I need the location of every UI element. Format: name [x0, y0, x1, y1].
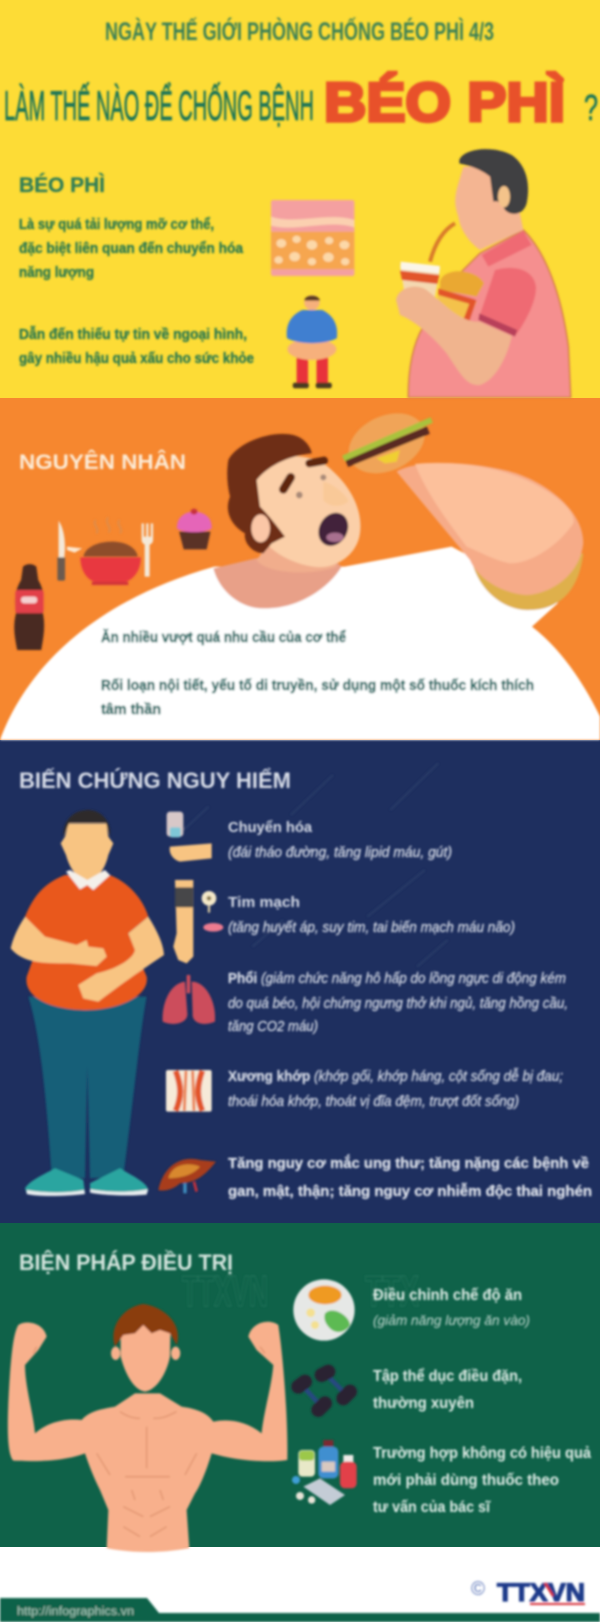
text: cardiovascular — [228, 895, 515, 936]
footer teal strip — [0, 1598, 600, 1622]
watermark — [182, 1267, 419, 1316]
text: exercise — [373, 1367, 522, 1412]
panel: dangerous complications — [11, 763, 592, 1200]
text: lungs: do quá béo, hội chứng ngưng thở khi ngủ, tăng hồng cầu, — [228, 996, 568, 1012]
icon: cola bottle — [14, 564, 44, 650]
text: other causes: tâm thần — [101, 702, 161, 718]
text: definition: năng lượng — [19, 265, 94, 281]
text: exercise: Tập thể dục điều đặn, — [373, 1367, 522, 1385]
heading: obesity highlighted: BÉO PHÌ — [324, 71, 565, 133]
section heading: causes: NGUYÊN NHÂN — [19, 450, 186, 474]
icon: knife, bowl and fork — [57, 517, 153, 585]
illustration: man's white body — [0, 547, 600, 740]
text: medication: tư vấn của bác sĩ — [373, 1499, 491, 1516]
text: other causes — [101, 678, 534, 718]
text: medication: mới phải dùng thuốc theo — [373, 1472, 559, 1489]
text: consequences: Dẫn đến thiếu tự tin về ngoại hình, — [19, 326, 247, 343]
illustration: muscular man — [8, 1304, 287, 1552]
icon: blood glucose test — [167, 812, 212, 862]
icon: lungs — [163, 975, 215, 1024]
text: exercise: thường xuyên — [373, 1395, 474, 1412]
text: other risks: Tăng nguy cơ mắc ung thư; tăng nặng các bệnh về — [228, 1154, 589, 1172]
icon: medicine — [292, 1440, 357, 1505]
logo: copyright TTXVN: © — [471, 1579, 485, 1600]
text: diet — [373, 1287, 530, 1328]
illustration: man eating burger — [213, 402, 583, 610]
panel: treatment — [8, 1250, 591, 1552]
text: cardiovascular: (tăng huyết áp, suy tim, tai biến mạch máu não) — [228, 920, 515, 936]
illustration: large man eating fast food — [396, 149, 571, 397]
panel: causes — [0, 402, 600, 740]
icon: blood pressure cuff on arm — [173, 880, 223, 963]
text: metabolism: (đái tháo đường, tăng lipid máu, gút) — [228, 845, 452, 861]
watermark: TTXVN — [182, 1267, 268, 1316]
text: other risks — [228, 1154, 592, 1200]
section heading: complications: BIẾN CHỨNG NGUY HIỂM — [19, 768, 291, 793]
section heading: treatment: BIỆN PHÁP ĐIỀU TRỊ — [19, 1250, 233, 1275]
text: consequences — [19, 326, 254, 367]
logo: copyright TTXVN: TTXVN — [497, 1579, 585, 1607]
text: bones and joints — [228, 1068, 563, 1110]
watermark: TTX — [365, 1267, 419, 1316]
illustration: man holding belly — [11, 810, 164, 1196]
text: metabolism: Chuyển hóa — [228, 820, 313, 836]
icon: dumbbells — [298, 1372, 350, 1410]
text: cardiovascular: Tim mạch — [228, 895, 300, 911]
text: diet: (giảm năng lượng ăn vào) — [373, 1312, 530, 1328]
text: other causes: Rối loạn nội tiết, yếu tố di truyền, sử dụng một số thuốc kích thích — [101, 678, 534, 694]
icon: skin and fat layers — [271, 200, 354, 276]
icon: small overweight man — [287, 295, 337, 388]
icon: liver — [158, 1159, 216, 1193]
text: consequences: gây nhiều hậu quả xấu cho sức khỏe — [19, 351, 254, 367]
text: definition: đặc biệt liên quan đến chuyển hóa — [19, 241, 244, 257]
text: definition — [19, 217, 244, 281]
text: lungs: Phổi (giảm chức năng hô hấp do lồng ngực di động kém — [228, 971, 566, 987]
panel: header and obesity definition — [4, 16, 598, 397]
icon: knee joint — [166, 1070, 212, 1112]
text: overeating: Ăn nhiều vượt quá nhu cầu của cơ thể — [101, 629, 346, 646]
text: bones and joints: Xương khớp (khớp gối, khớp háng, cột sống dễ bị đau; — [228, 1068, 563, 1085]
text: lungs — [228, 971, 568, 1035]
text: metabolism — [228, 820, 452, 861]
text: other risks: gan, mật, thận; tăng nguy cơ nhiễm độc thai nghén — [228, 1183, 592, 1200]
footer — [0, 1579, 600, 1622]
icon: cupcake — [177, 509, 212, 549]
text: definition: Là sự quá tải lượng mỡ cơ thể, — [19, 217, 214, 233]
text: medication — [373, 1445, 591, 1516]
icon: plate of food — [293, 1279, 355, 1341]
footer url: http://infographics.vn — [17, 1606, 134, 1618]
text: bones and joints: thoái hóa khớp, thoát vị đĩa đệm, trượt đốt sống) — [228, 1094, 519, 1110]
section heading: obesity: BÉO PHÌ — [19, 174, 105, 197]
text: lungs: tăng CO2 máu) — [228, 1019, 318, 1035]
text: diet: Điều chỉnh chế độ ăn — [373, 1287, 522, 1304]
